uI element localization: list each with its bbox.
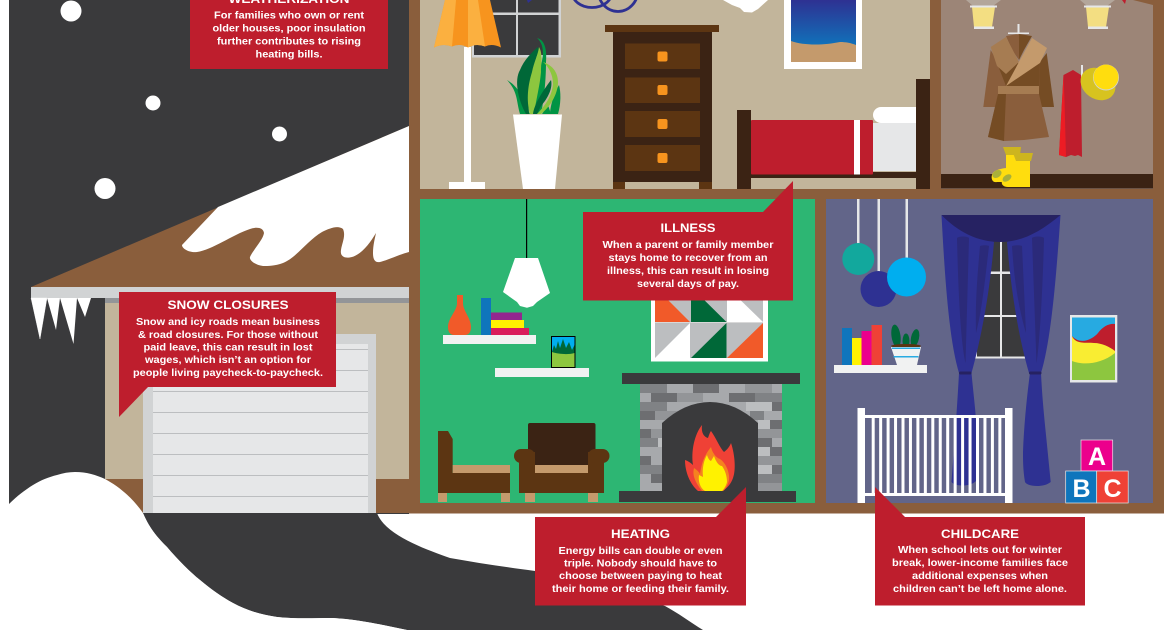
callout: childcare [875, 487, 1085, 606]
callout: weatherization: For families who own or rent [214, 10, 365, 22]
shelf upper [443, 335, 536, 344]
dresser [605, 25, 719, 189]
red scarf [1059, 65, 1083, 157]
callout: weatherization: further contributes to rising [217, 36, 361, 48]
vase [448, 295, 471, 335]
garage wall [105, 303, 409, 480]
alphabet blocks: B [1072, 475, 1091, 503]
callout: heating: choose between paying to heat [559, 571, 723, 582]
fire [685, 425, 735, 491]
house structure [409, 0, 1164, 514]
room: hallway [941, 0, 1153, 189]
callout: heating: HEATING [611, 527, 670, 541]
callout: weatherization: older houses, poor insulation [212, 24, 366, 34]
callout: illness: When a parent or family member [602, 240, 774, 251]
callout: illness [583, 181, 793, 300]
curtain ties [959, 372, 1042, 374]
ceiling lamp [723, 0, 768, 12]
floor lamp [434, 0, 501, 189]
alphabet blocks [1066, 440, 1128, 503]
icicles [31, 298, 47, 339]
pendant lamp [503, 199, 550, 308]
shelf [834, 365, 927, 373]
yellow hat [1074, 61, 1122, 107]
garage door [143, 334, 376, 513]
callout: childcare: CHILDCARE [941, 527, 1019, 541]
room: living room [420, 199, 815, 503]
callout: snow closures: SNOW CLOSURES [168, 298, 288, 312]
road [143, 513, 703, 630]
callout: childcare: additional expenses when [912, 571, 1048, 582]
potted plant [507, 38, 562, 189]
abstract painting [1070, 315, 1117, 382]
callout: snow closures [119, 292, 336, 417]
callout: childcare: children can’t be left home alone. [893, 584, 1067, 595]
shelf lower [495, 368, 589, 377]
callout: illness: illness, this can result in losing [607, 266, 769, 277]
room: nursery [826, 199, 1153, 503]
alphabet blocks: A [1088, 443, 1106, 471]
callout: heating: triple. Nobody should have to [564, 559, 717, 570]
armchair [514, 423, 610, 502]
yellow boots [991, 147, 1033, 187]
snow hill [9, 472, 407, 630]
roof corner [1133, 0, 1153, 5]
nursery books [842, 325, 882, 365]
crib [858, 408, 1012, 503]
night sky background [9, 0, 409, 514]
beach painting [784, 0, 862, 69]
callout: childcare: break, lower-income families face [892, 558, 1068, 569]
callout: snow closures: people living paycheck-to-paycheck. [133, 368, 323, 379]
hanging ball lights [842, 199, 926, 307]
right curtain [1007, 215, 1060, 486]
bed [737, 79, 930, 189]
roof snow [182, 126, 409, 266]
geometric painting [651, 287, 768, 362]
callout: childcare: When school lets out for winter [898, 545, 1062, 556]
curtain valance [942, 215, 1060, 242]
callout: snow closures: wages, which isn’t an option for [144, 355, 311, 366]
garage roof [31, 126, 409, 287]
garage [31, 126, 409, 513]
callout: heating: their home or feeding their family. [552, 584, 729, 595]
soffit [31, 287, 409, 298]
callout: illness: stays home to recover from an [608, 253, 768, 264]
snowflakes [60, 0, 287, 199]
mobile swirl [572, 0, 638, 12]
window [472, 0, 561, 58]
callout: weatherization: heating bills. [256, 50, 323, 60]
callout: illness: several days of pay. [637, 279, 739, 290]
books [481, 298, 529, 335]
callout: heating [535, 487, 746, 606]
room: bedroom [420, 0, 930, 189]
wall sconce right [1080, 0, 1115, 29]
coat [983, 24, 1054, 141]
left curtain [942, 215, 994, 486]
chaise [438, 431, 510, 502]
night window [975, 238, 1028, 358]
small landscape frame [551, 336, 576, 368]
fireplace [619, 373, 800, 502]
alphabet blocks: C [1103, 475, 1122, 503]
callout: snow closures: & road closures. For those without [138, 330, 319, 341]
wall sconce left [966, 0, 1001, 29]
garage base [105, 479, 409, 513]
callout: snow closures: paid leave, this can result in lost [144, 342, 313, 354]
callout: weatherization [190, 0, 388, 69]
small plant [890, 324, 921, 365]
callout: heating: Energy bills can double or even [558, 546, 722, 557]
callout: illness: ILLNESS [660, 221, 716, 235]
callout: snow closures: Snow and icy roads mean business [136, 317, 320, 328]
